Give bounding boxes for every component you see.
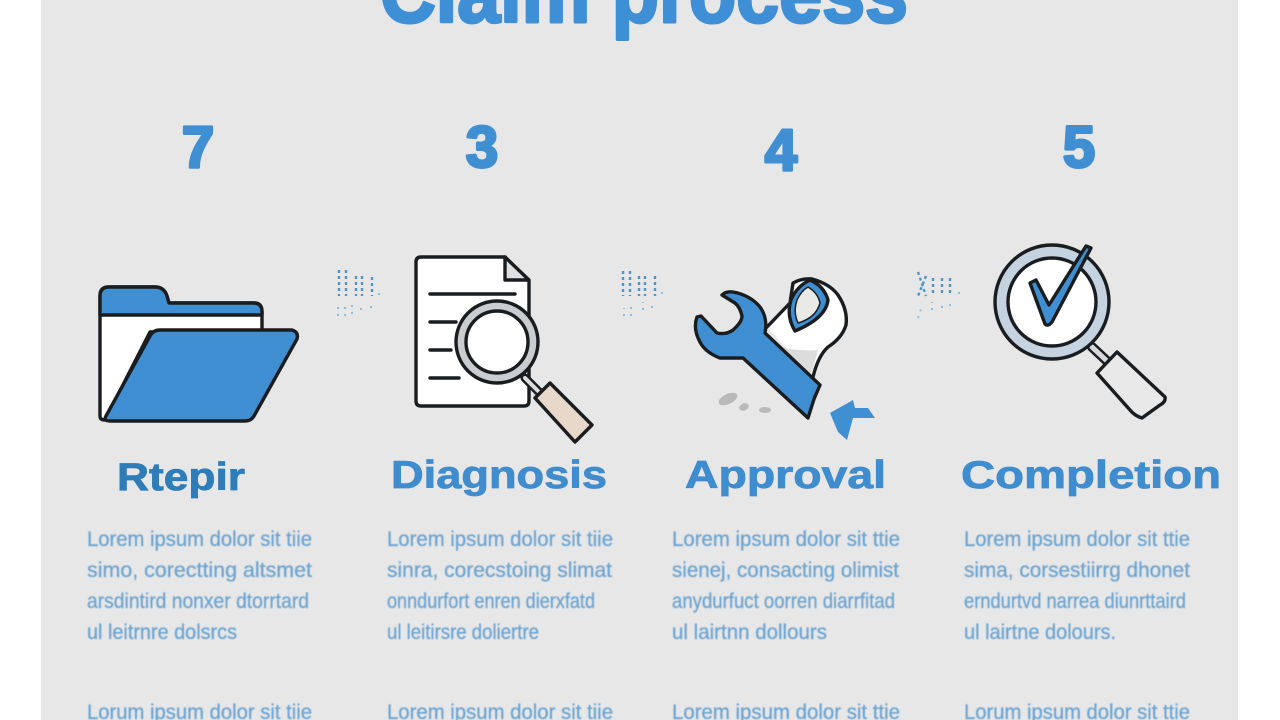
text block: column 4: erndurtvd narrea diunrttaird	[964, 590, 1186, 613]
icon: folder	[100, 287, 297, 421]
step numbers: 5	[1063, 115, 1095, 180]
text block: column 3: ul lairtnn dollours	[672, 621, 827, 644]
text block: column 3: anydurfuct oorren diarrfitad	[672, 590, 895, 613]
step numbers: 3	[466, 115, 498, 180]
heading: Completion: Completion	[961, 454, 1221, 497]
text block: column 3	[672, 528, 900, 720]
icon: grey smudges	[717, 390, 771, 413]
text block: column 2: sinra, corecstoing slimat	[387, 559, 612, 582]
arrow: blue	[830, 400, 875, 440]
arrow: dotted glyphs 3	[918, 272, 961, 318]
text block: column 3: Lorem ipsum dolor sit ttie	[672, 528, 900, 551]
text block: column 4: ul lairtne dolours.	[964, 621, 1116, 644]
text block: column 2	[387, 528, 613, 720]
icon: wrench and part	[695, 279, 846, 418]
text block: column 1: ul leitrnre dolsrcs	[87, 621, 237, 644]
text block: column 3: sienej, consacting olimist	[672, 559, 899, 582]
text block: column 2: ul leitirsre doliertre	[387, 621, 539, 644]
arrow: dotted glyphs 2	[623, 271, 664, 316]
icon: document with magnifier	[416, 257, 592, 442]
text block: column 1	[87, 528, 312, 720]
text block: column 1: simo, corectting altsmet	[87, 559, 312, 582]
text block: column 4: Lorem ipsum dolor sit ttie	[964, 528, 1190, 551]
text block: column 1: arsdintird nonxer dtorrtard	[87, 590, 309, 613]
text block: column 2: onndurfort enren dierxfatd	[387, 590, 595, 613]
heading: Approval: Approval	[685, 454, 886, 497]
step numbers	[182, 115, 1095, 183]
heading: Diagnosis: Diagnosis	[391, 454, 607, 497]
icon: magnifier with checkmark	[995, 245, 1165, 418]
arrow: dotted glyphs 1	[338, 270, 381, 316]
text block: column 4	[964, 528, 1190, 720]
heading: Rtepir: Rtepir	[117, 456, 245, 499]
text block: column 1: Lorem ipsum dolor sit tiie	[87, 528, 312, 551]
step numbers: 4	[765, 118, 797, 183]
text block: column 4: sima, corsestiirrg dhonet	[964, 559, 1190, 582]
text block: column 2: Lorem ipsum dolor sit tiie	[387, 528, 613, 551]
step numbers: 7	[182, 115, 214, 180]
